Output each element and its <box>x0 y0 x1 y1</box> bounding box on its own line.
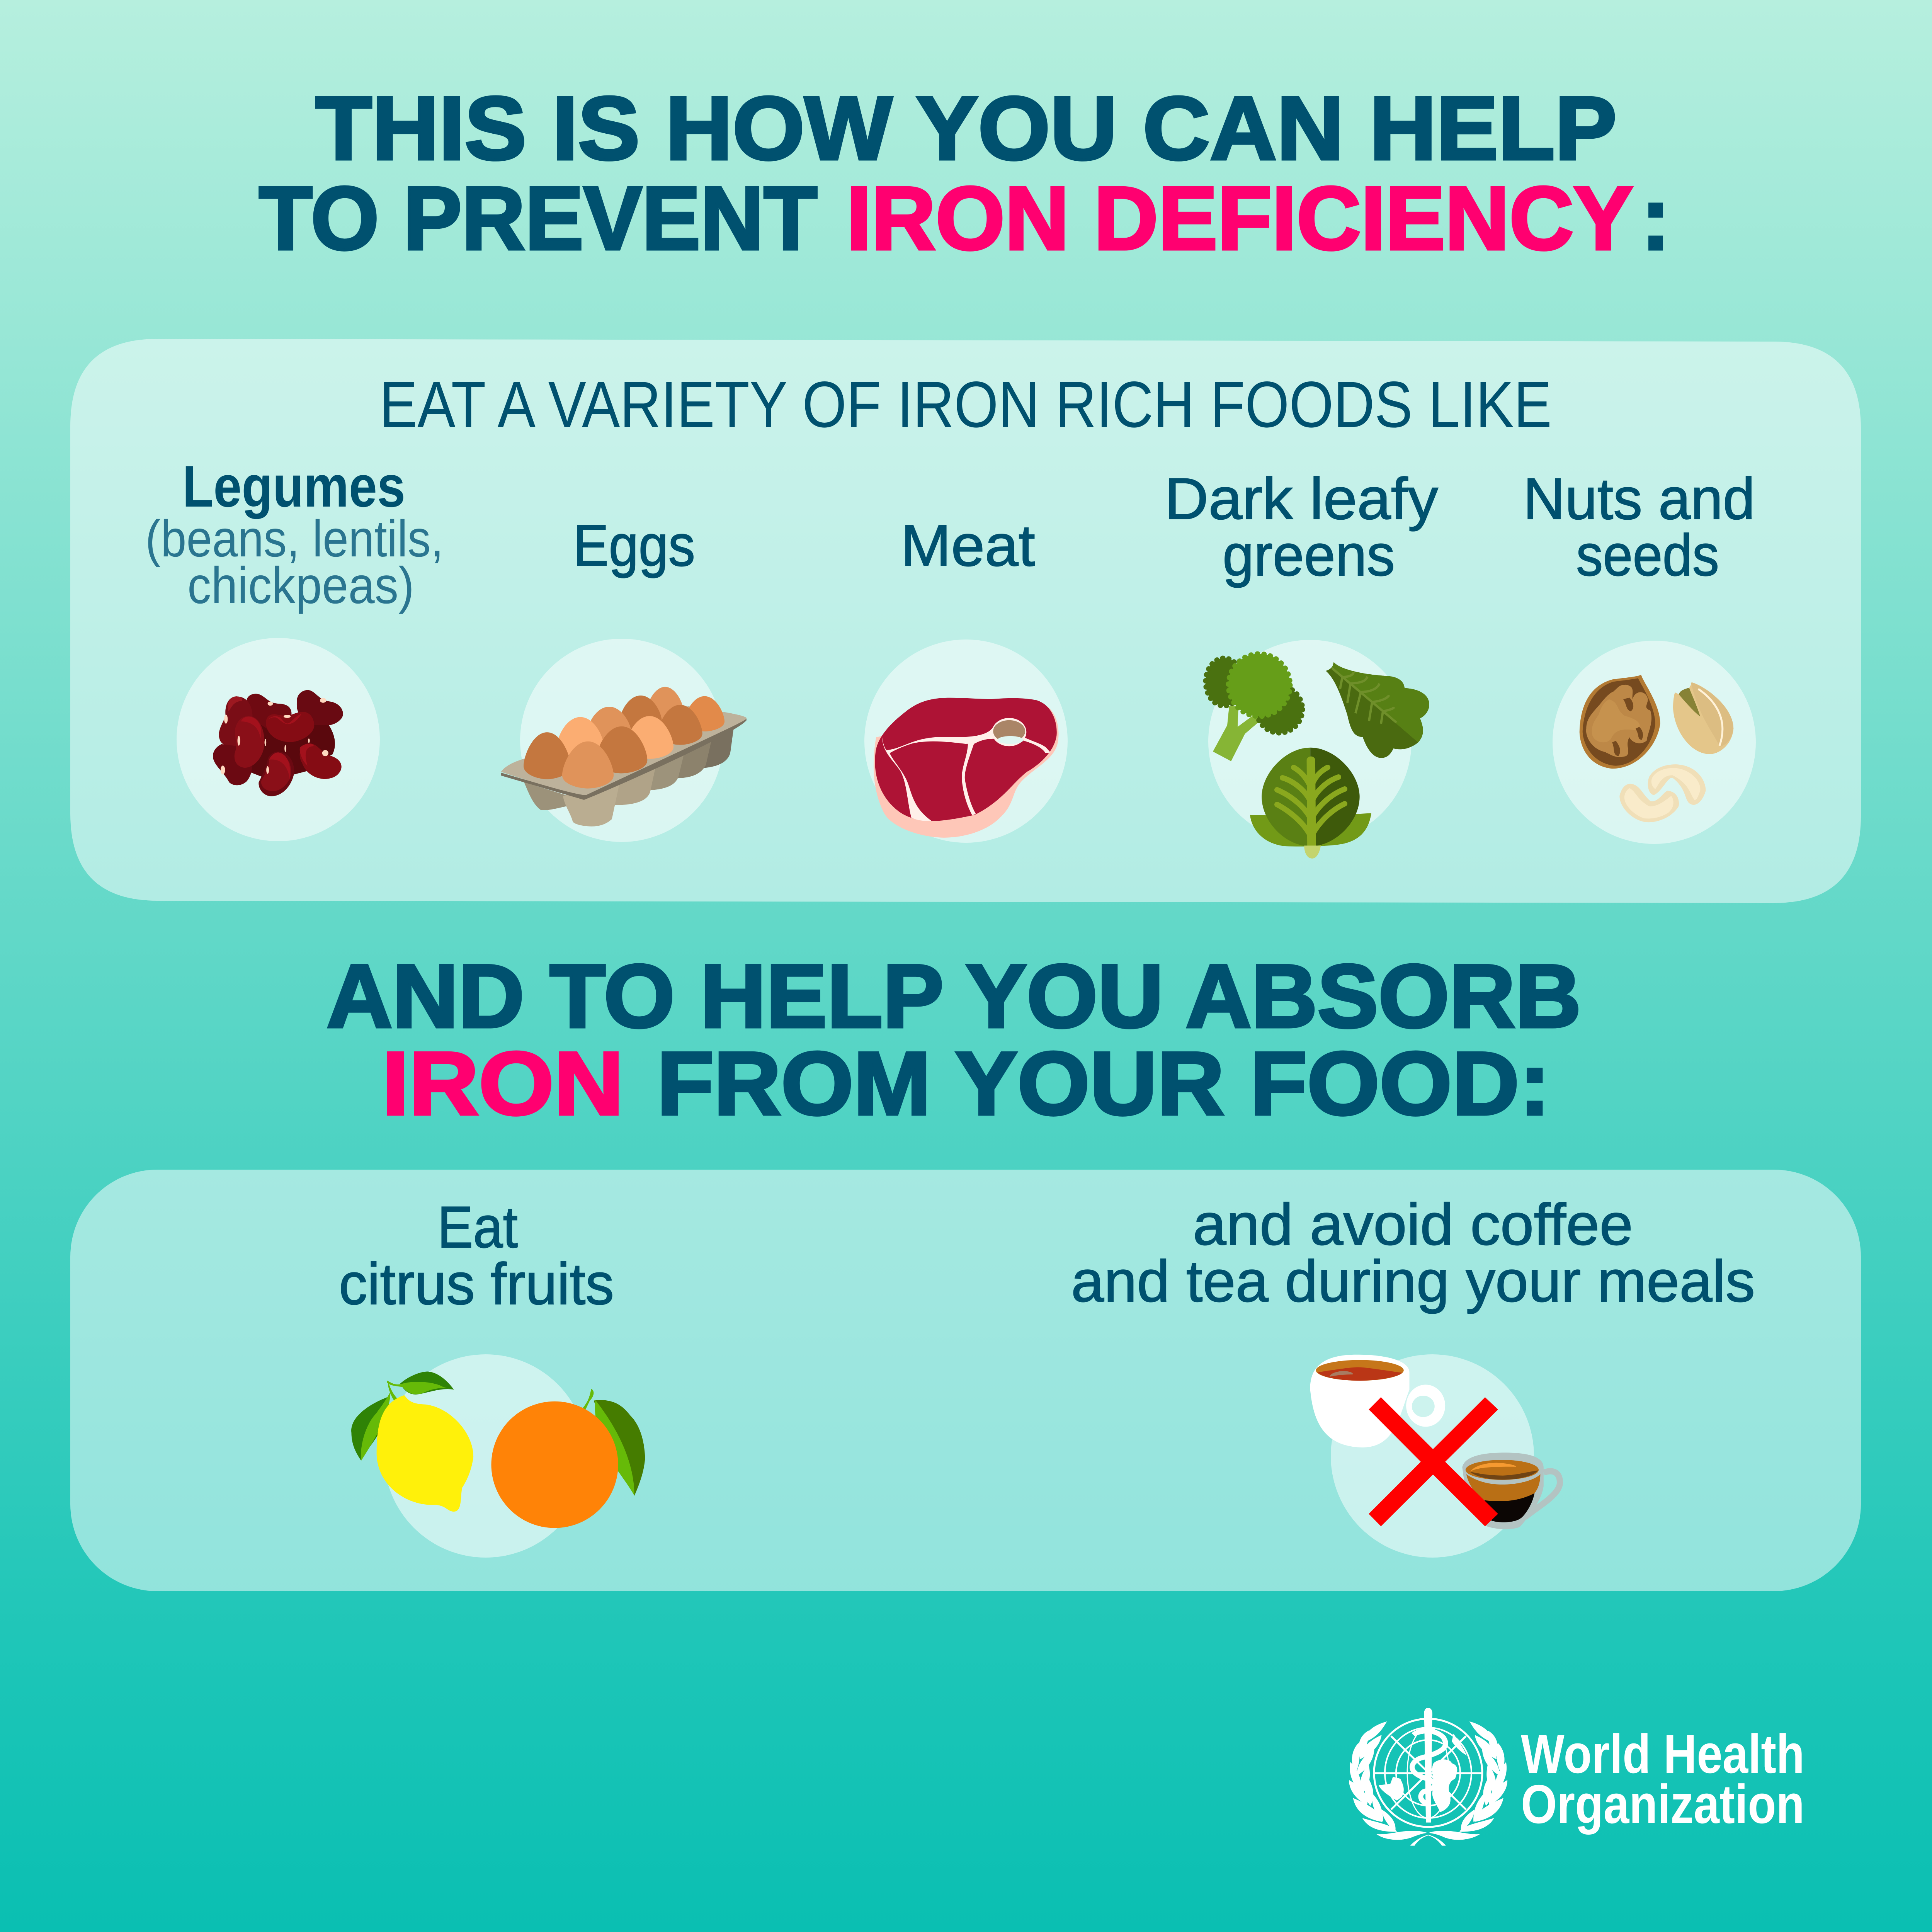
label: eat citrus fruits: citrus fruits <box>339 1251 614 1317</box>
orange leaves <box>582 1389 645 1496</box>
continents <box>1432 1759 1457 1812</box>
lemon <box>377 1395 473 1512</box>
title: : <box>1641 168 1670 269</box>
red cross <box>1369 1397 1498 1526</box>
emblem <box>1349 1708 1507 1846</box>
spinach leaf <box>1326 662 1429 758</box>
title: TO PREVENT <box>259 168 817 269</box>
icon: nuts and seeds <box>1553 641 1756 844</box>
label: meat: Meat <box>901 513 1035 578</box>
coffee cup handle <box>1525 1471 1560 1517</box>
label: nuts and seeds: seeds <box>1576 522 1719 588</box>
title: THIS IS HOW YOU CAN HELP <box>315 78 1617 179</box>
label: dark leafy greens: greens <box>1223 522 1395 588</box>
icon: meat <box>864 639 1068 843</box>
label: dark leafy greens <box>1165 466 1438 588</box>
tea cup <box>1310 1355 1445 1447</box>
panel: iron rich foods <box>70 339 1861 903</box>
ribbon <box>1376 1831 1480 1846</box>
heading: and to help you absorb <box>327 946 1581 1134</box>
organisation name: World Health <box>1521 1723 1804 1785</box>
pistachio highlight <box>1698 689 1723 746</box>
title <box>259 78 1670 269</box>
label: avoid coffee and tea: and tea during your meals <box>1071 1248 1755 1314</box>
icon: dark leafy greens <box>1206 640 1429 859</box>
organisation name: Organization <box>1521 1774 1804 1835</box>
lemon leaves <box>351 1372 454 1461</box>
pistachio <box>1673 682 1733 754</box>
label: eat citrus fruits: Eat <box>437 1194 518 1260</box>
broccoli <box>1206 654 1303 761</box>
globe <box>1374 1719 1482 1827</box>
label: legumes: Legumes <box>182 454 405 519</box>
serpent <box>1412 1731 1446 1804</box>
wreath right <box>1459 1721 1507 1832</box>
label: eggs: Eggs <box>573 513 695 578</box>
heading: and to help you absorb: FROM YOUR FOOD: <box>657 1034 1550 1134</box>
title: IRON DEFICIENCY <box>847 168 1633 269</box>
organisation name <box>1521 1723 1804 1835</box>
staff <box>1424 1708 1432 1823</box>
icon: no coffee or tea <box>1310 1354 1560 1558</box>
label: nuts and seeds: Nuts and <box>1523 466 1755 532</box>
label: legumes: chickpeas) <box>187 557 414 614</box>
panel heading: EAT A VARIETY OF IRON RICH FOODS LIKE <box>379 368 1552 441</box>
orange <box>491 1401 618 1528</box>
cashews <box>1619 764 1706 822</box>
label: avoid coffee and tea: and avoid coffee <box>1193 1192 1633 1257</box>
wreath left <box>1349 1721 1397 1832</box>
label: dark leafy greens: Dark leafy <box>1165 466 1438 532</box>
heading: and to help you absorb: AND TO HELP YOU ABSORB <box>327 946 1581 1046</box>
icon: legumes <box>177 638 380 841</box>
heading: and to help you absorb: IRON <box>382 1034 624 1134</box>
lettuce leaf <box>1250 748 1371 859</box>
label: legumes <box>145 454 444 614</box>
panel: absorb iron <box>70 1170 1861 1591</box>
label: legumes: (beans, lentils, <box>145 510 444 568</box>
coffee cup <box>1462 1452 1544 1529</box>
label: nuts and seeds <box>1523 466 1755 588</box>
icon: citrus fruits <box>351 1354 645 1558</box>
WHO logo <box>1349 1708 1804 1846</box>
label: avoid coffee and tea <box>1071 1192 1755 1314</box>
icon: eggs in carton <box>501 639 747 842</box>
walnut <box>1580 675 1660 769</box>
label: eat citrus fruits <box>339 1194 614 1317</box>
